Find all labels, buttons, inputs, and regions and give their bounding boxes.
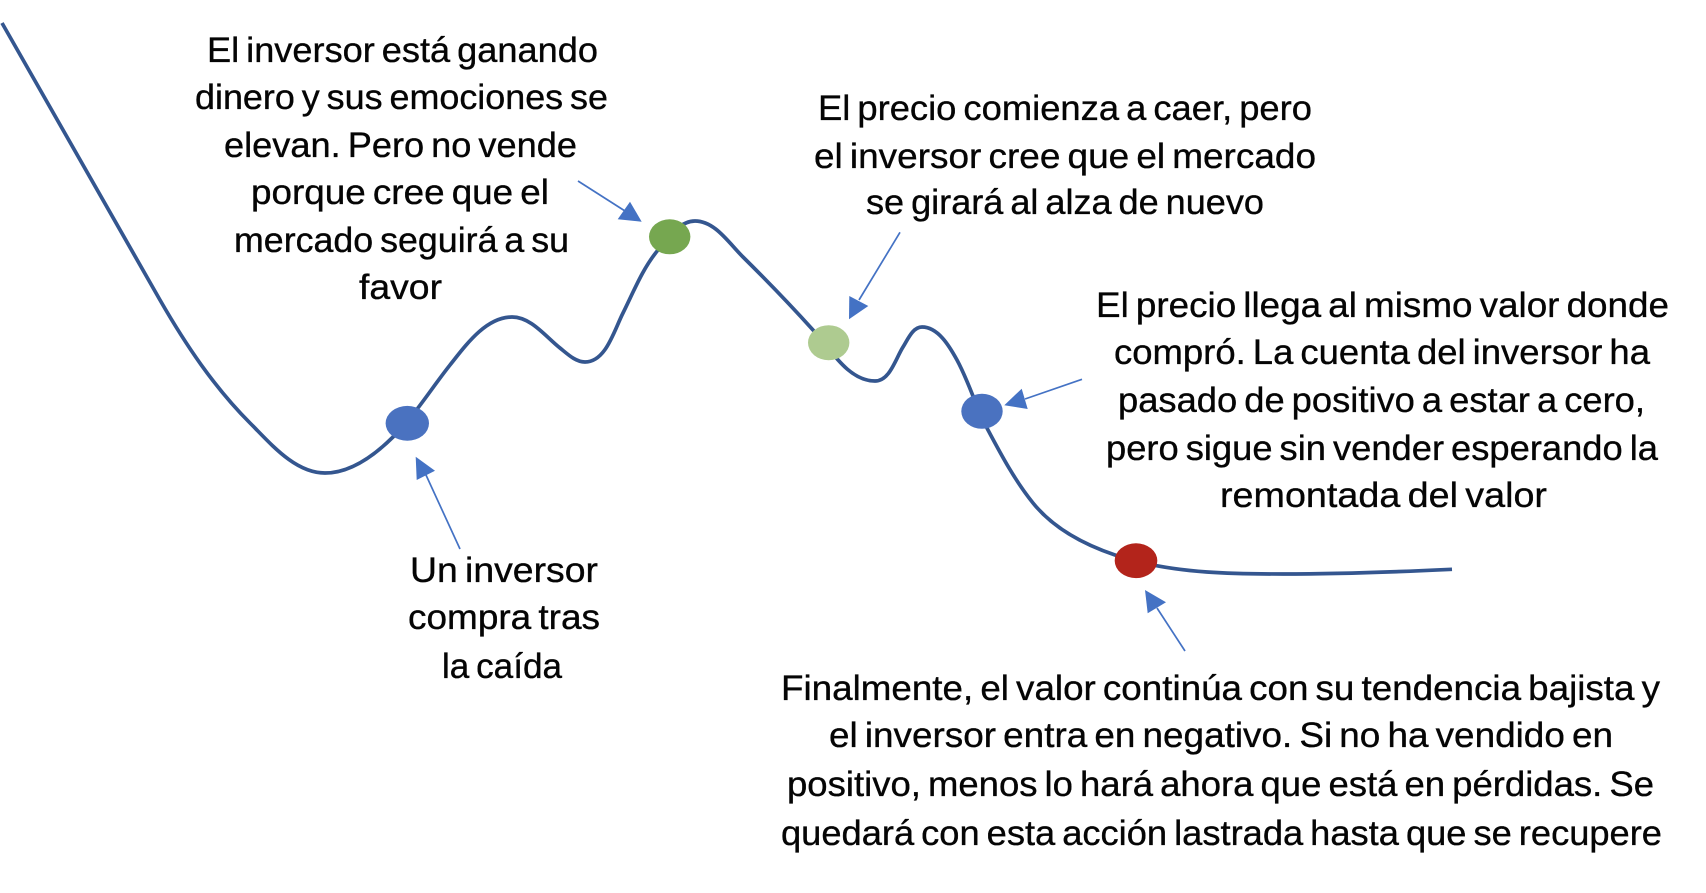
text: price reaches entry value: compró. La cuenta del inversor ha <box>1114 332 1650 372</box>
text: price reaches entry value: pero sigue sin vender esperando la <box>1106 428 1658 468</box>
text: investor ends up in losses: positivo, menos lo hará ahora que está en pérdidas. Se <box>787 764 1654 804</box>
text: investor buys after the drop: compra tras <box>408 597 600 637</box>
text: investor ends up in losses: quedará con esta acción lastrada hasta que se recupere <box>781 813 1662 853</box>
arrow: to peak point <box>578 181 642 222</box>
text: investor ends up in losses <box>781 668 1662 853</box>
text: investor buys after the drop <box>408 550 600 686</box>
text: price reaches entry value: remontada del valor <box>1220 475 1547 515</box>
arrow: to entry price point <box>1004 379 1082 409</box>
text: price reaches entry value: pasado de positivo a estar a cero, <box>1118 380 1645 420</box>
text: investor earning money: El inversor está ganando <box>207 30 598 70</box>
point: price starts falling (light green) <box>808 325 849 360</box>
point: purchase (blue) <box>386 406 429 441</box>
text: price reaches entry value <box>1096 285 1669 515</box>
text: investor earning money: porque cree que el <box>251 172 549 212</box>
point: peak (green) <box>649 219 690 254</box>
price curve <box>2 23 1452 574</box>
arrow: to purchase point <box>416 457 460 549</box>
text: price starts falling: El precio comienza a caer, pero <box>818 88 1312 128</box>
text: investor buys after the drop: Un inversor <box>410 550 598 590</box>
text: investor earning money: dinero y sus emociones se <box>195 77 608 117</box>
text: investor earning money: elevan. Pero no vende <box>224 125 577 165</box>
text: investor ends up in losses: Finalmente, el valor continúa con su tendencia bajista y <box>781 668 1660 708</box>
text: investor earning money <box>195 30 608 307</box>
point: loss (red) <box>1115 543 1157 578</box>
text: investor buys after the drop: la caída <box>442 646 562 686</box>
text: investor ends up in losses: el inversor entra en negativo. Si no ha vendido en <box>829 715 1613 755</box>
point: back to entry price (blue) <box>961 394 1003 429</box>
arrow: to loss point <box>1145 590 1185 651</box>
arrow: to falling point <box>849 232 900 319</box>
text: investor earning money: favor <box>359 267 442 307</box>
text: price reaches entry value: El precio llega al mismo valor donde <box>1096 285 1669 325</box>
text: price starts falling: se girará al alza de nuevo <box>866 182 1264 222</box>
text: price starts falling <box>814 88 1316 222</box>
text: investor earning money: mercado seguirá a su <box>234 220 569 260</box>
text: price starts falling: el inversor cree que el mercado <box>814 136 1316 176</box>
